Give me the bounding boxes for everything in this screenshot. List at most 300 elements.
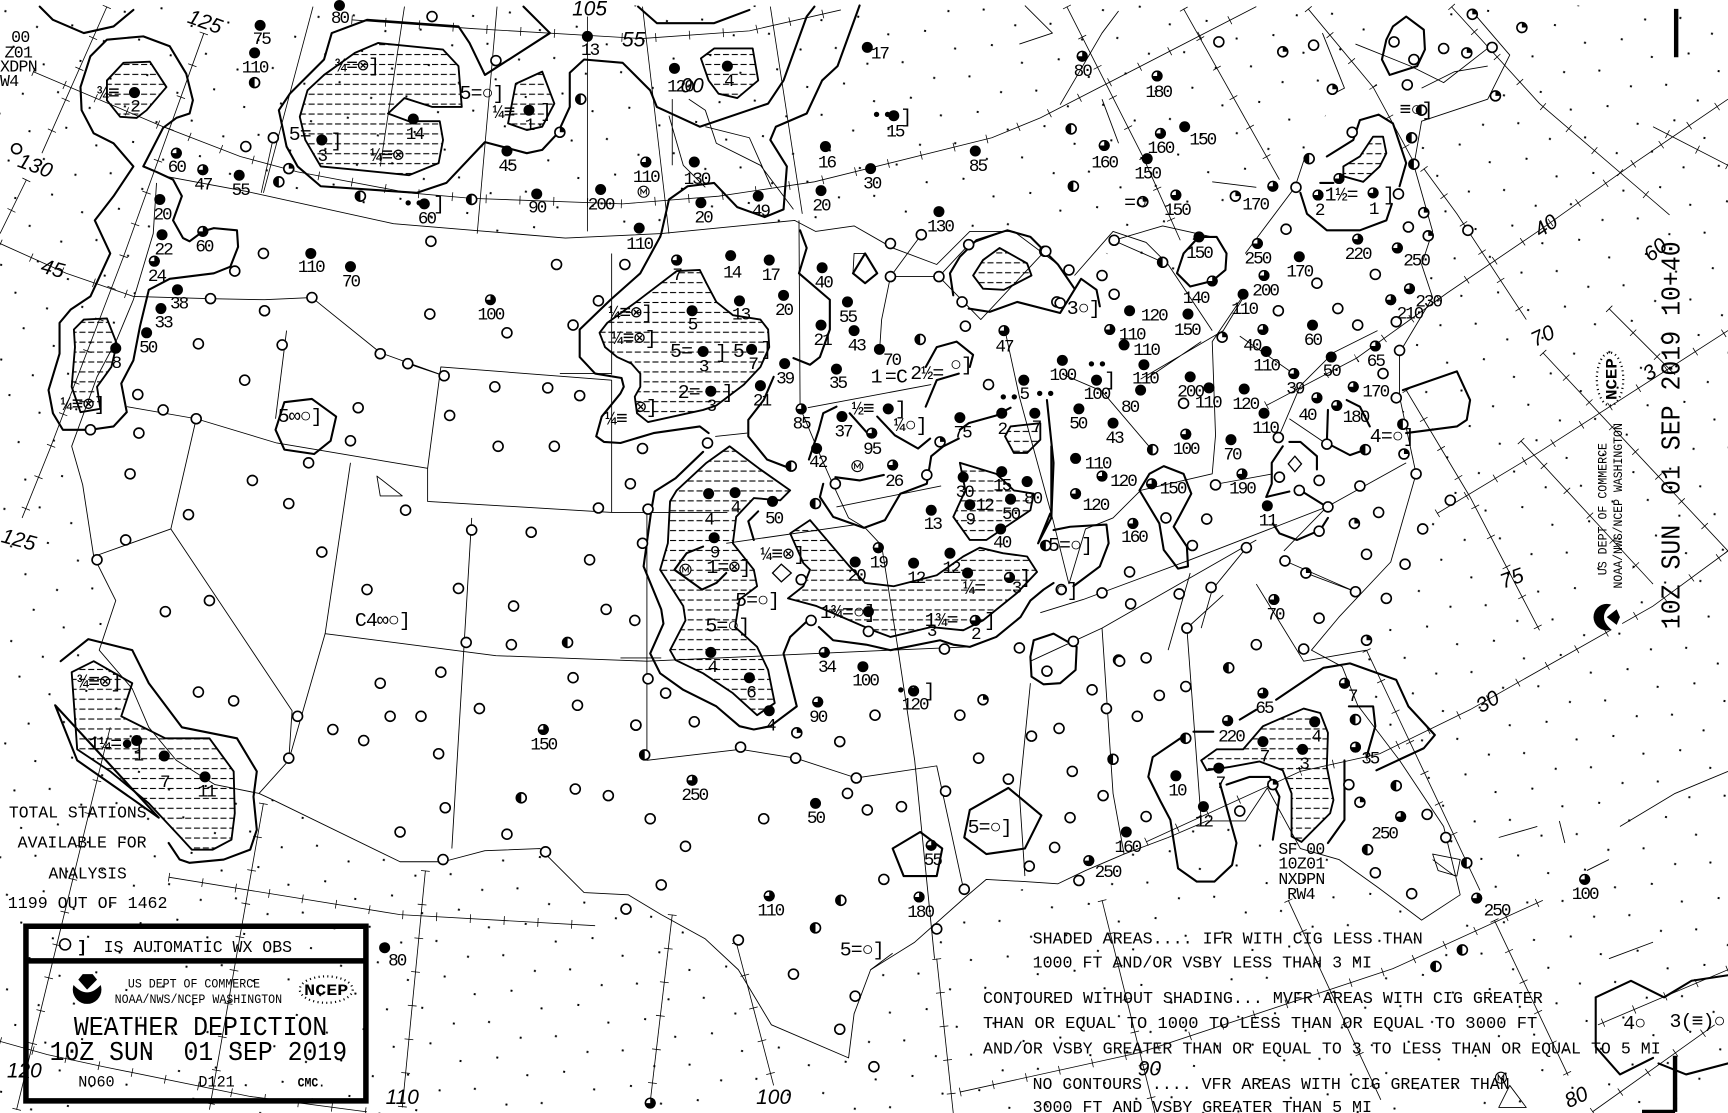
station height and visibility numbers: 2 (971, 625, 981, 645)
total stations note: ANALYSIS (49, 864, 127, 883)
weather and visibility symbols: ] (331, 130, 342, 153)
station height and visibility numbers: 21 (814, 331, 832, 351)
station height and visibility numbers: 1 (1369, 200, 1379, 220)
station height and visibility numbers: 110 (1253, 356, 1281, 376)
legend text: CONTOURED WITHOUT SHADING... MVFR AREAS WITH CIG GREATER (983, 989, 1543, 1008)
IFR area: Nebraska and Kansas (660, 446, 790, 715)
station height and visibility numbers: 180 (907, 903, 934, 923)
weather and visibility symbols: 1¼=●] (88, 732, 143, 755)
station height and visibility numbers: 55 (232, 181, 250, 201)
total stations note: 1199 OUT OF 1462 (8, 894, 168, 913)
IFR area: New England (1343, 137, 1386, 182)
station height and visibility numbers: 75 (953, 423, 972, 443)
latitude and longitude labels: 125 (0, 524, 39, 556)
station height and visibility numbers: 120 (1232, 395, 1260, 415)
weather and visibility symbols: ¼≡⊗ (370, 144, 404, 167)
station height and visibility numbers: 80 (1074, 62, 1092, 82)
station height and visibility numbers: 12 (942, 559, 961, 579)
weather and visibility symbols: ¾≡ (97, 82, 119, 105)
station height and visibility numbers: 24 (148, 267, 167, 287)
station height and visibility numbers: 20 (848, 567, 866, 587)
station height and visibility numbers: 130 (927, 217, 954, 237)
latitude and longitude labels: 130 (15, 149, 56, 183)
station height and visibility numbers: 7 (1260, 747, 1270, 767)
station height and visibility numbers: 14 (406, 125, 424, 145)
station height and visibility numbers: 70 (342, 273, 360, 293)
IFR area: Alberta (300, 43, 462, 175)
legend text: NO CONTOURS .... VFR AREAS WITH CIG GREATER THAN (1033, 1075, 1510, 1094)
station height and visibility numbers: 250 (681, 786, 709, 806)
weather and visibility symbols: ] (984, 609, 995, 632)
station height and visibility numbers: 70 (883, 351, 902, 371)
station height and visibility numbers: 60 (168, 158, 186, 178)
station height and visibility numbers: 15 (886, 123, 905, 143)
weather and visibility symbols: =C (885, 365, 908, 388)
station height and visibility numbers: 65 (1255, 699, 1274, 719)
station height and visibility numbers: 160 (1121, 528, 1148, 548)
station height and visibility numbers: 60 (1304, 331, 1323, 351)
station height and visibility numbers: 120 (1083, 496, 1110, 516)
station height and visibility numbers: 42 (809, 453, 828, 473)
station identifier blocks: NXDPN (1278, 870, 1325, 889)
icon: diamond (773, 456, 1301, 582)
station height and visibility numbers: 2 (130, 97, 140, 117)
weather and visibility symbols: 5=○] (705, 614, 749, 637)
station height and visibility numbers: 170 (1286, 263, 1314, 283)
product codes: NO60 (78, 1074, 115, 1092)
station height and visibility numbers: 250 (1403, 252, 1430, 272)
station height and visibility numbers: 2 (1315, 201, 1325, 221)
weather and visibility symbols: 4○ (1623, 1012, 1645, 1035)
station height and visibility numbers: 35 (1361, 750, 1380, 770)
IFR area: North Dakota and South Dakota (600, 270, 769, 422)
station height and visibility numbers: 4 (704, 511, 714, 531)
station height and visibility numbers: 4 (731, 498, 741, 518)
weather and visibility symbols: 5∞○] (278, 405, 322, 428)
weather and visibility symbols: ¼≡⊗] (612, 327, 656, 350)
weather and visibility symbols: 3(≡)○ (1670, 1010, 1725, 1033)
department text: US DEPT OF COMMERCE (128, 976, 260, 991)
station height and visibility numbers: 85 (969, 157, 988, 177)
legend text: SHADED AREAS.... IFR WITH CIG LESS THAN (1033, 929, 1423, 948)
weather and visibility symbols: •• (1085, 353, 1108, 376)
station height and visibility numbers: 110 (633, 168, 660, 188)
latitude and longitude labels: 75 (1497, 564, 1527, 593)
station height and visibility numbers: 39 (776, 369, 795, 389)
station height and visibility numbers: 1 (133, 746, 143, 766)
station height and visibility numbers: 110 (1252, 419, 1279, 439)
station height and visibility numbers: 4 (1312, 728, 1322, 748)
station height and visibility numbers: 49 (752, 202, 770, 222)
station identifier blocks: XDPN (0, 58, 37, 77)
latitude and longitude labels: 00 (680, 75, 704, 98)
station height and visibility numbers: 110 (1133, 341, 1160, 361)
latitude and longitude labels: 80 (1561, 1082, 1592, 1113)
station height and visibility numbers: 110 (1231, 300, 1258, 320)
station height and visibility numbers: 160 (1114, 838, 1142, 858)
station height and visibility numbers: 7 (672, 266, 682, 286)
weather and visibility symbols: 2½= (910, 362, 943, 385)
legend text (983, 929, 1661, 1113)
station height and visibility numbers: 70 (1223, 446, 1242, 466)
weather and visibility symbols: 4=○] (1370, 425, 1414, 448)
station height and visibility numbers: 180 (1145, 83, 1173, 103)
station height and visibility numbers: 13 (924, 515, 942, 535)
weather and visibility symbols: ½≡ (852, 397, 874, 420)
station height and visibility numbers: 250 (1245, 249, 1272, 269)
station height and visibility numbers: 100 (852, 671, 879, 691)
station height and visibility numbers: 50 (765, 509, 784, 529)
weather and visibility symbols: ○] (950, 353, 972, 376)
station identifier blocks (0, 28, 1325, 904)
weather and visibility symbols: 3○] (1067, 297, 1100, 320)
weather and visibility symbols: ] (924, 679, 935, 702)
weather and visibility symbols: ] (1383, 184, 1394, 207)
station height and visibility numbers: 40 (1298, 406, 1317, 426)
station height and visibility numbers: 11 (1259, 512, 1277, 532)
IFR area: Missouri band (788, 520, 1037, 637)
legend text: 1000 FT AND/OR VSBY LESS THAN 3 MI (1033, 954, 1372, 973)
station height and visibility numbers: 110 (757, 902, 785, 922)
latitude and longitude labels: 55 (622, 28, 646, 51)
weather and visibility symbols: 5 (733, 340, 744, 363)
station height and visibility numbers: 7 (1216, 774, 1226, 794)
product codes (78, 1074, 325, 1092)
shaded IFR areas (72, 43, 1386, 850)
weather and visibility symbols: ¼○] (894, 414, 927, 437)
station height and visibility numbers: 150 (1160, 480, 1187, 500)
weather and visibility symbols: ] (900, 105, 911, 128)
total stations note: TOTAL STATIONS (9, 804, 147, 823)
date and time: 10Z SUN 01 SEP 2019 (50, 1038, 347, 1068)
weather and visibility symbols: 5=○] (735, 589, 779, 612)
weather and visibility symbols: ≡○] (1400, 99, 1433, 122)
latitude and longitude labels: 110 (386, 1086, 419, 1109)
latitude and longitude labels: 125 (185, 5, 226, 39)
station height and visibility numbers: 21 (753, 392, 772, 412)
station height and visibility numbers: 120 (902, 696, 929, 716)
weather and visibility symbols: ¼≡⊗] (760, 543, 805, 566)
weather and visibility symbols: ¼≡ (605, 407, 627, 430)
station height and visibility numbers: 170 (1362, 383, 1390, 403)
station identifier blocks: Z01 (4, 43, 33, 62)
station height and visibility numbers: 200 (588, 195, 615, 215)
weather and visibility symbols: =○ (1124, 191, 1146, 214)
product codes: D121 (198, 1074, 235, 1092)
weather and visibility symbols: ¼≡⊗] (608, 301, 652, 324)
station height and visibility numbers: 7 (1032, 418, 1042, 438)
weather and visibility symbols: C4∞○] (355, 609, 410, 632)
station height and visibility numbers: 55 (839, 308, 857, 328)
weather and visibility symbols: •• (1034, 383, 1056, 406)
weather and visibility symbols: •• (871, 104, 893, 127)
station height and visibility numbers: 3 (1012, 579, 1022, 599)
station height and visibility numbers: 120 (1141, 307, 1168, 327)
IFR area: Indiana (1005, 423, 1040, 453)
station height and visibility numbers: 8 (111, 354, 121, 374)
station height and visibility numbers: 10 (1168, 782, 1187, 802)
station height and visibility numbers: 110 (626, 235, 653, 255)
station height and visibility numbers: 4 (708, 658, 718, 678)
station height and visibility numbers: 50 (1002, 505, 1021, 525)
station height and visibility numbers: 85 (793, 415, 811, 435)
weather and visibility symbols: 1=⊗] (706, 556, 751, 579)
station height and visibility numbers: 40 (815, 274, 833, 294)
weather and visibility symbols: ⊗] (635, 396, 657, 419)
station height and visibility numbers: 16 (818, 154, 837, 174)
station height and visibility numbers: 40 (993, 534, 1012, 554)
station height and visibility numbers: 80 (388, 951, 407, 971)
station height and visibility numbers: 2 (997, 420, 1007, 440)
latitude and longitude labels: 70 (1527, 321, 1559, 352)
latitude and longitude labels: 120 (7, 1060, 42, 1083)
station height and visibility numbers: 22 (155, 241, 173, 261)
station height and visibility numbers: 230 (1415, 292, 1443, 312)
station height and visibility numbers: 150 (1189, 130, 1217, 150)
station height and visibility numbers: 4 (724, 72, 734, 92)
station height and visibility numbers: 12 (1195, 812, 1213, 832)
station height and visibility numbers: 130 (684, 170, 711, 190)
IFR area: California (72, 661, 235, 850)
station height and visibility numbers: 5 (1019, 385, 1029, 405)
station height and visibility numbers: 5 (688, 315, 698, 335)
IFR area: Wisconsin (973, 248, 1032, 290)
station height and visibility numbers: 220 (1218, 728, 1245, 748)
weather and visibility symbols: 5= (289, 123, 311, 146)
weather and visibility symbols: 1½= (1325, 184, 1358, 207)
weather and visibility symbols: ] (715, 341, 726, 364)
total stations note: AVAILABLE FOR (18, 833, 147, 852)
department text (115, 976, 282, 1007)
station height and visibility numbers: 250 (1371, 825, 1398, 845)
station height and visibility numbers: 45 (498, 157, 517, 177)
station height and visibility numbers: 210 (1397, 304, 1424, 324)
station height and visibility numbers: 110 (1119, 325, 1146, 345)
station height and visibility numbers: 110 (242, 59, 269, 79)
latitude and longitude labels: 45 (38, 255, 67, 283)
station height and visibility numbers: 40 (1243, 336, 1262, 356)
weather and visibility symbols: ¼≡ (493, 101, 515, 124)
station height and visibility numbers: 1 (525, 116, 535, 136)
weather and visibility symbols: ] (1104, 369, 1115, 392)
weather and visibility symbols: 1¾= (925, 609, 958, 632)
rotated issuer text (1596, 423, 1626, 588)
weather and visibility symbols: ¼= (963, 577, 985, 600)
weather and visibility symbols: ] (433, 192, 444, 215)
station height and visibility numbers: 120 (667, 77, 694, 97)
weather and visibility symbols: 5=○] (460, 82, 504, 105)
station height and visibility numbers: 100 (1572, 885, 1599, 905)
station height and visibility numbers: 38 (170, 295, 189, 315)
station height and visibility numbers: 110 (298, 258, 325, 278)
station identifier blocks: 00 (11, 28, 30, 47)
icon: NCEP logo: NCEP (304, 982, 348, 1000)
weather and visibility symbols: 5=○] (968, 816, 1012, 839)
weather and visibility symbols: ] (895, 397, 906, 420)
IFR area: Washington coast (72, 318, 117, 412)
weather and visibility symbols: 1 (871, 365, 882, 388)
station height and visibility numbers: 220 (1345, 245, 1372, 265)
station height and visibility numbers: 60 (418, 210, 437, 230)
icon: NCEP logo (300, 976, 353, 1003)
station height and visibility numbers: 13 (581, 41, 600, 61)
station height and visibility numbers: 19 (870, 554, 888, 574)
department text: NOAA/NWS/NCEP WASHINGTON (115, 992, 282, 1007)
station height and visibility numbers: 17 (762, 266, 780, 286)
station height and visibility numbers: 15 (993, 476, 1012, 496)
automatic observation key: IS AUTOMATIC WX OBS (104, 938, 292, 957)
station height and visibility numbers: 14 (723, 264, 742, 284)
station height and visibility numbers: 100 (478, 306, 505, 326)
station height and visibility numbers: 20 (775, 301, 794, 321)
station height and visibility numbers: 3 (699, 357, 709, 377)
weather and visibility symbols: 1¾=○] (820, 601, 875, 624)
station height and visibility numbers: 90 (809, 708, 828, 728)
weather and visibility symbols: •• (997, 386, 1019, 409)
station height and visibility numbers: 12 (976, 496, 994, 516)
station identifier blocks: SF 00 (1278, 840, 1325, 859)
station height and visibility numbers: 250 (1095, 863, 1122, 883)
station height and visibility numbers: 110 (1195, 394, 1222, 414)
total stations note (8, 804, 168, 913)
automatic observation key: ] (77, 938, 87, 957)
weather and visibility symbols: 5=○] (1048, 534, 1092, 557)
station height and visibility numbers: 20 (695, 209, 713, 229)
station height and visibility numbers: 37 (834, 422, 853, 442)
station height and visibility numbers: 100 (1049, 366, 1077, 386)
station height and visibility numbers: 11 (198, 783, 216, 803)
station height and visibility numbers: 13 (732, 306, 751, 326)
station height and visibility numbers: 60 (195, 237, 214, 257)
station height and visibility numbers: 150 (1186, 244, 1213, 264)
latitude and longitude labels: 60 (1639, 234, 1672, 266)
station height and visibility numbers: 140 (1183, 289, 1210, 309)
station height and visibility numbers: 190 (1229, 480, 1256, 500)
station height and visibility numbers: 43 (848, 336, 866, 356)
weather and visibility symbols: ] (722, 381, 733, 404)
station height and visibility numbers: 150 (1174, 321, 1201, 341)
weather and visibility symbols: 2= (678, 381, 700, 404)
station height and visibility numbers: 3 (927, 622, 937, 642)
station height and visibility numbers: 100 (1173, 440, 1200, 460)
station height and visibility numbers: 170 (1242, 195, 1269, 215)
station identifier blocks: 10Z01 (1278, 854, 1325, 873)
station height and visibility numbers: 7 (1348, 687, 1358, 707)
IFR area: Saskatchewan (508, 72, 554, 130)
station height and visibility numbers: 26 (885, 472, 904, 492)
weather and visibility symbols: ¼≡⊗] (61, 393, 105, 416)
IFR area: Manitoba (701, 48, 758, 98)
title: weather depiction: WEATHER DEPICTION (74, 1013, 327, 1043)
station height and visibility numbers: 35 (829, 374, 848, 394)
icon: NOAA logo (73, 974, 101, 1004)
station height and visibility numbers: 9 (965, 511, 975, 531)
station height and visibility numbers: 200 (1177, 383, 1204, 403)
station height and visibility numbers: 150 (1134, 165, 1162, 185)
latitude and longitude labels: 30 (1472, 686, 1504, 718)
station height and visibility numbers: 120 (1110, 472, 1137, 492)
station height and visibility numbers: 65 (1367, 352, 1385, 372)
rotated issuer text: NOAA/NWS/NCEP WASHINGTON (1611, 423, 1626, 588)
station height and visibility numbers: 43 (1106, 429, 1124, 449)
latitude and longitude labels: 3 (1639, 360, 1661, 386)
station height and visibility numbers: 47 (995, 338, 1014, 358)
product codes: CMC. (298, 1076, 325, 1091)
weather and visibility symbols: ○] (1056, 579, 1078, 602)
station height and visibility numbers: 100 (1084, 385, 1111, 405)
station identifier blocks: RW4 (1287, 885, 1316, 904)
registration marks (1642, 9, 1676, 1112)
latitude and longitude labels: 40 (1530, 210, 1563, 242)
weather and visibility symbols: 5=○] (840, 938, 884, 961)
icon: rotated NOAA logo (1594, 604, 1622, 630)
station height and visibility numbers: 95 (863, 440, 882, 460)
weather and visibility symbols: ¾≡⊗] (77, 671, 121, 694)
station height and visibility numbers: 250 (1484, 902, 1511, 922)
station height and visibility numbers: 50 (1069, 415, 1088, 435)
weather and visibility symbols: ] (540, 100, 551, 123)
station height and visibility numbers: 80 (331, 9, 349, 29)
weather and visibility symbols: ] (760, 338, 771, 361)
station height and visibility numbers: 80 (1024, 490, 1043, 510)
station height and visibility numbers: 30 (956, 483, 974, 503)
weather and visibility symbols: ] (1019, 566, 1030, 589)
station height and visibility numbers: 33 (155, 313, 173, 333)
station height and visibility numbers: 75 (253, 30, 271, 50)
IFR area: Illinois (953, 463, 1034, 540)
station height and visibility numbers: 160 (1148, 139, 1175, 159)
station height and visibility numbers: 6 (746, 684, 756, 704)
station height and visibility numbers: 55 (924, 851, 942, 871)
title block (26, 926, 366, 1101)
rotated date stamp: 10Z SUN 01 SEP 2019 10+40 (1657, 241, 1687, 629)
station height and visibility numbers: 30 (863, 174, 882, 194)
station height and visibility numbers: 150 (530, 735, 558, 755)
station height and visibility numbers: 50 (807, 809, 826, 829)
station height and visibility numbers: 39 (1286, 379, 1305, 399)
station height and visibility numbers: 7 (748, 355, 758, 375)
station height and visibility numbers: 9 (710, 544, 720, 564)
station height and visibility numbers: 20 (812, 196, 831, 216)
station height and visibility numbers: 110 (1132, 369, 1159, 389)
IFR area: British Columbia coast (107, 62, 166, 118)
station height and visibility numbers: 17 (871, 44, 889, 64)
station height and visibility numbers: 180 (1343, 408, 1370, 428)
icon: rotated NCEP logo: NCEP (1604, 358, 1622, 400)
station height and visibility numbers: 50 (139, 339, 158, 359)
station height and visibility numbers: 3 (318, 147, 328, 167)
station height and visibility numbers: 200 (1252, 281, 1279, 301)
station height and visibility numbers: 110 (1085, 454, 1112, 474)
station height and visibility numbers: 3 (707, 397, 717, 417)
station height and visibility numbers: 50 (1323, 362, 1341, 382)
latitude and longitude labels: 90 (1138, 1058, 1161, 1081)
station height and visibility numbers: 90 (528, 199, 547, 219)
station height and visibility numbers: 47 (194, 176, 213, 196)
rotated issuer text: US DEPT OF COMMERCE (1596, 443, 1611, 575)
IFR area: Florida panhandle (1201, 709, 1333, 842)
station height and visibility numbers: 7 (160, 773, 170, 793)
station height and visibility numbers: 80 (1121, 398, 1140, 418)
legend text: AND/OR VSBY GREATER THAN OR EQUAL TO 3 TO LESS THAN OR EQUAL TO 5 MI (983, 1039, 1661, 1058)
weather and visibility symbols: •• (895, 679, 917, 702)
station height and visibility numbers: 70 (1266, 605, 1285, 625)
legend text: THAN OR EQUAL TO 1000 TO LESS THAN OR EQUAL TO 3000 FT (983, 1014, 1537, 1033)
weather and visibility symbols: •• (402, 192, 424, 215)
station height and visibility numbers: 12 (907, 569, 926, 589)
station height and visibility numbers: 150 (1164, 201, 1191, 221)
weather and visibility symbols: 5= (670, 340, 692, 363)
